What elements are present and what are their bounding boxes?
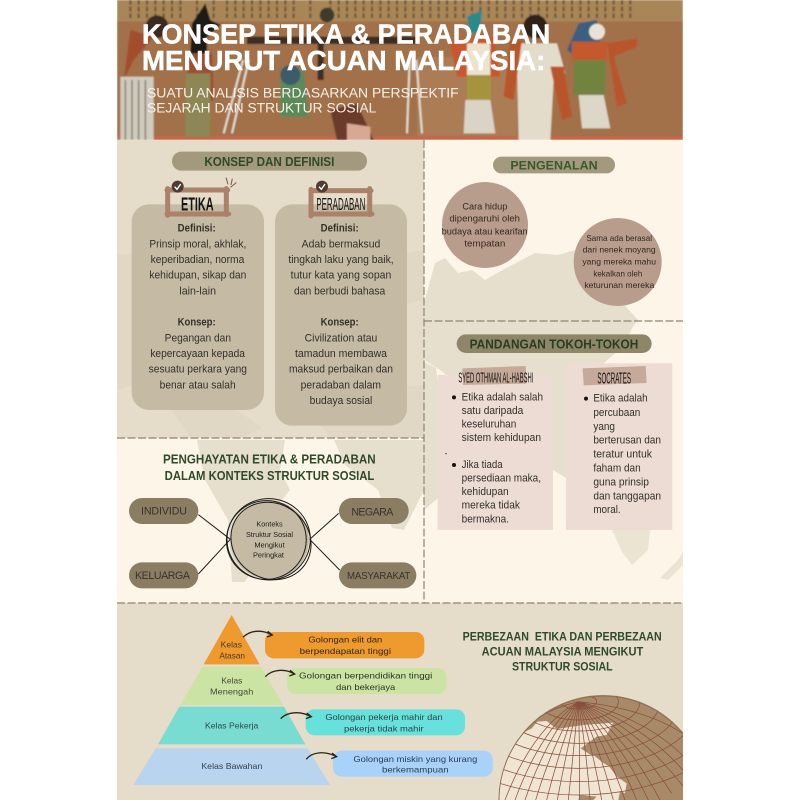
connector lines	[198, 513, 340, 574]
card: syed othman al-habshi	[438, 366, 553, 530]
heading: STRUKTUR SOSIAL	[512, 661, 613, 674]
panel: penghayatan etika dan peradaban	[129, 451, 416, 595]
card: socrates: faham dan	[593, 462, 641, 474]
card: socrates: SOCRATES	[597, 370, 631, 387]
pyramid tier: kelas atasan	[204, 615, 260, 664]
circle: sama ada berasal: kekalkan oleh	[593, 268, 643, 278]
icon: etika check badge	[172, 181, 184, 193]
box: golongan berpendidikan: Golongan berpendidikan tinggi	[299, 671, 432, 681]
card: socrates: Etika adalah	[593, 393, 648, 405]
card: peradaban	[275, 204, 407, 426]
card: syed othman al-habshi: kehidupan	[462, 486, 509, 498]
subtitle: SUATU ANALISIS BERDASARKAN PERSPEKTIF	[147, 86, 459, 101]
icon: globe	[498, 695, 683, 800]
card: syed othman al-habshi: mereka tidak	[462, 500, 520, 512]
box: golongan pekerja	[306, 709, 465, 735]
card: socrates: dan tanggapan	[593, 490, 661, 502]
arrow: menengah	[265, 670, 295, 677]
card: socrates: moral.	[593, 504, 621, 516]
card: peradaban: dan berbudi bahasa	[294, 285, 386, 297]
pyramid tier: kelas menengah: Kelas	[221, 676, 243, 686]
card: syed othman al-habshi: bermakna.	[462, 513, 509, 525]
label: peradaban frame: PERADABAN	[316, 194, 365, 214]
circle: sama ada berasal: Sama ada berasal	[586, 233, 652, 243]
card: syed othman al-habshi: SYED OTHMAN AL-HABSHI	[458, 370, 533, 386]
pyramid tier: kelas menengah: Menengah	[210, 687, 254, 697]
card: etika: Konsep:	[178, 317, 216, 329]
card: socrates: percubaan	[593, 407, 640, 419]
pyramid tier: kelas pekerja	[158, 707, 305, 744]
icon: peradaban check badge	[316, 181, 328, 193]
card: peradaban: tamadun membawa	[295, 348, 388, 360]
card: syed othman al-habshi: keseluruhan	[462, 419, 516, 431]
card: etika: Pegangan dan	[165, 332, 231, 344]
central circle: Peringkat	[253, 551, 285, 560]
heading pill: pandangan tokoh-tokoh	[457, 334, 652, 353]
box: golongan miskin: Golongan miskin yang kurang	[353, 754, 478, 764]
heading: ACUAN MALAYSIA MENGIKUT	[482, 646, 643, 659]
card: peradaban: peradaban dalam	[301, 379, 381, 391]
pyramid tier: kelas pekerja: Kelas Pekerja	[205, 721, 259, 731]
heading: PENGHAYATAN ETIKA & PERADABAN	[163, 451, 376, 466]
card: socrates	[566, 363, 672, 530]
dashed section dividers	[117, 140, 683, 603]
card: etika: Prinsip moral, akhlak,	[149, 238, 246, 250]
pill: negara	[339, 498, 409, 524]
card: peradaban: tutur kata yang sopan	[291, 270, 391, 282]
card: peradaban: maksud perbaikan dan	[289, 364, 393, 376]
icon: spark lines	[226, 178, 236, 187]
pill: masyarakat: MASYARAKAT	[347, 571, 410, 582]
box: golongan berpendidikan: dan bekerjaya	[336, 682, 396, 692]
painting: Egyptian papyrus scene	[117, 0, 683, 140]
card: socrates: guna prinsip	[593, 476, 649, 488]
box: golongan pekerja: Golongan pekerja mahir dan	[325, 712, 443, 722]
card: etika: kehidupan, sikap dan	[149, 270, 246, 282]
heading pill: pengenalan: PENGENALAN	[510, 158, 598, 172]
circle: cara hidup: Cara hidup	[462, 201, 507, 211]
pyramid tier: kelas bawahan	[133, 748, 330, 785]
panel: konsep dan definisi	[132, 152, 407, 426]
circle: cara hidup: tempatan	[464, 239, 505, 249]
card: peradaban: Adab bermaksud	[302, 238, 380, 250]
page background panels	[117, 140, 683, 800]
circle: sama ada berasal	[574, 218, 662, 306]
heading pill: konsep dan definisi: KONSEP DAN DEFINISI	[204, 155, 334, 169]
subtitle: SEJARAH DAN STRUKTUR SOSIAL	[147, 100, 377, 115]
title: MENURUT ACUAN MALAYSIA:	[142, 45, 545, 76]
card: etika	[132, 204, 264, 410]
card: syed othman al-habshi: Etika adalah salah	[462, 391, 543, 403]
box: golongan berpendidikan	[287, 668, 446, 694]
card: syed othman al-habshi: satu daripada	[462, 405, 524, 417]
card: socrates: berterusan dan	[593, 435, 661, 447]
heading: PERBEZAAN ETIKA DAN PERBEZAAN	[463, 631, 662, 644]
box: golongan miskin	[333, 751, 493, 777]
panel: pyramid of social classes	[133, 615, 493, 785]
panel: perbezaan heading and globe	[463, 632, 683, 800]
heading	[463, 631, 662, 674]
central circle: Struktur Sosial	[246, 530, 293, 539]
card: peradaban: tingkah laku yang baik,	[288, 254, 394, 266]
box: golongan elit: berpendapatan tinggi	[300, 646, 391, 656]
subtitle	[147, 86, 459, 115]
card: peradaban: Definisi:	[321, 223, 359, 235]
heading pill: konsep dan definisi	[172, 152, 367, 171]
pyramid tier: kelas menengah	[180, 667, 283, 705]
card: peradaban: Konsep:	[321, 317, 359, 329]
box: golongan elit: Golongan elit dan	[308, 635, 383, 645]
circle: cara hidup: dipengaruhi oleh	[449, 214, 520, 224]
pill: negara: NEGARA	[351, 506, 394, 518]
panel: pandangan tokoh-tokoh	[438, 334, 672, 530]
card: etika: sesuatu perkara yang	[149, 364, 247, 376]
circle: sama ada berasal: keturunan mereka	[584, 280, 655, 290]
central circle: Konteks	[256, 520, 283, 529]
label: etika frame: ETIKA	[181, 194, 214, 215]
circle: sama ada berasal: dari nenek moyang	[583, 245, 656, 255]
pyramid tier: kelas bawahan: Kelas Bawahan	[201, 761, 263, 771]
pill: keluarga: KELUARGA	[135, 570, 191, 582]
heading	[163, 451, 376, 483]
header banner with papyrus painting	[117, 0, 683, 140]
pill: keluarga	[129, 562, 198, 588]
card: etika: lain-lain	[179, 285, 216, 297]
arrow: pekerja	[281, 713, 311, 719]
heading: DALAM KONTEKS STRUKTUR SOSIAL	[165, 468, 374, 483]
label: etika frame	[167, 189, 229, 215]
panel: pengenalan	[442, 157, 662, 306]
label: peradaban frame	[311, 189, 372, 216]
arrow: bawahan	[306, 753, 337, 759]
heading pill: pandangan tokoh-tokoh: PANDANGAN TOKOH-TOKOH	[470, 337, 638, 351]
circle: cara hidup: budaya atau kearifan	[442, 226, 528, 236]
circle: sama ada berasal: yang mereka mahu	[582, 256, 656, 266]
card: socrates: yang	[593, 421, 615, 433]
pyramid tier: kelas atasan: Atasan	[219, 650, 245, 660]
circle: cara hidup	[442, 182, 528, 268]
title	[142, 18, 550, 76]
card: peradaban: budaya sosial	[310, 395, 372, 407]
card: etika: Definisi:	[178, 223, 216, 235]
central circle: Mengikut	[254, 540, 286, 549]
card: etika: kepercayaan kepada	[150, 348, 246, 360]
title: KONSEP ETIKA & PERADABAN	[142, 18, 550, 49]
heading pill: pengenalan	[493, 157, 615, 173]
card: socrates: teratur untuk	[593, 449, 652, 461]
pill: individu: INDIVIDU	[141, 506, 187, 518]
card: etika: benar atau salah	[160, 379, 236, 391]
pill: individu	[129, 498, 198, 524]
card: syed othman al-habshi: Jika tiada	[462, 459, 503, 471]
box: golongan elit	[265, 632, 424, 658]
card: peradaban: Civilization atau	[305, 332, 377, 344]
card: etika: keperibadian, norma	[151, 254, 245, 266]
box: golongan pekerja: pekerja tidak mahir	[344, 723, 424, 733]
world map background	[197, 250, 683, 582]
pill: masyarakat	[339, 562, 416, 588]
card: syed othman al-habshi: persediaan maka,	[462, 473, 541, 485]
central circle	[215, 487, 326, 595]
card: syed othman al-habshi: sistem kehidupan	[462, 432, 541, 444]
pyramid tier: kelas atasan: Kelas	[221, 640, 243, 650]
arrow: atasan	[243, 631, 272, 637]
box: golongan miskin: berkemampuan	[382, 765, 449, 775]
